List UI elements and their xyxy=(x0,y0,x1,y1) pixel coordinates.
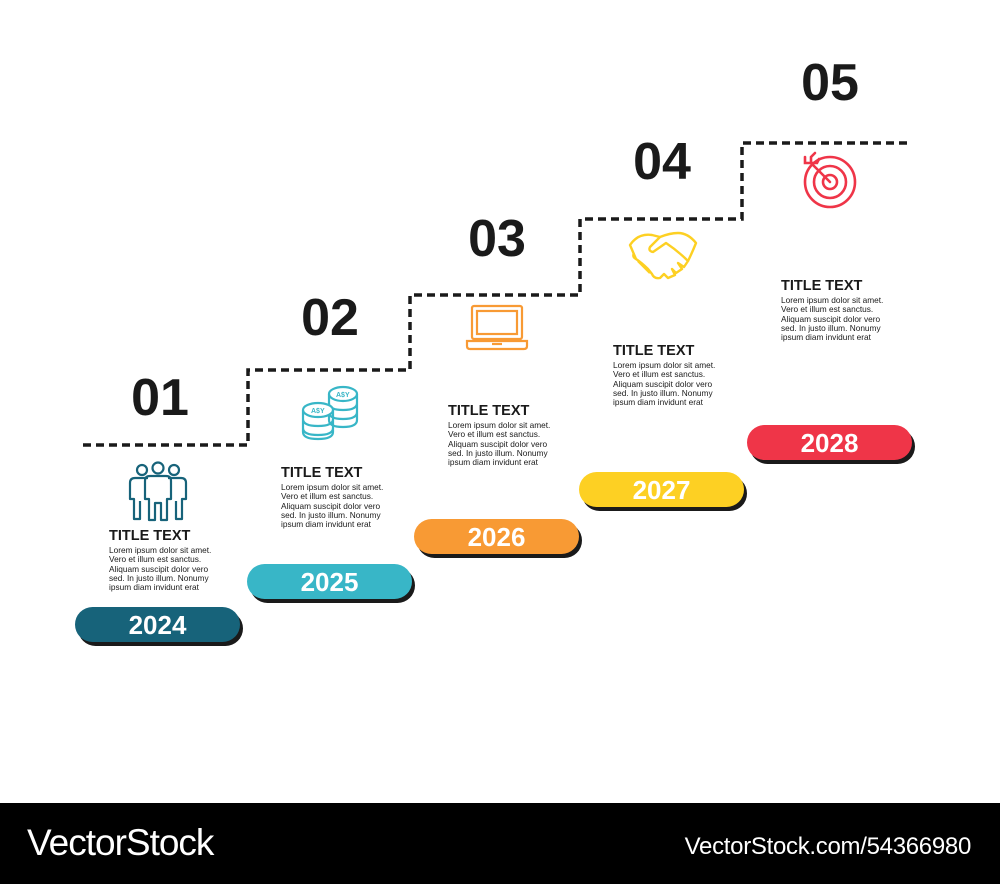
pill 2024: 2024 xyxy=(129,610,186,640)
pill 2026: 2026 xyxy=(468,522,525,552)
text block 5: sed. In justo illum. Nonumy xyxy=(781,323,881,333)
pill 2027: 2027 xyxy=(633,475,690,505)
text block 1: ipsum diam invidunt erat xyxy=(109,582,199,592)
text block 3: Lorem ipsum dolor sit amet. xyxy=(448,420,550,430)
text block 3 xyxy=(448,403,550,467)
number 05: 05 xyxy=(801,54,859,112)
text block 3: sed. In justo illum. Nonumy xyxy=(448,448,548,458)
text block 4: Aliquam suscipit dolor vero xyxy=(613,379,712,389)
number 02: 02 xyxy=(301,289,359,347)
text block 4: Lorem ipsum dolor sit amet. xyxy=(613,360,715,370)
pill 2026 xyxy=(414,519,579,554)
text block 5 xyxy=(781,278,883,342)
icon: people xyxy=(128,461,188,522)
text block 4: sed. In justo illum. Nonumy xyxy=(613,388,713,398)
text block 3: ipsum diam invidunt erat xyxy=(448,457,538,467)
pill 2024 xyxy=(75,607,240,642)
text block 2: Aliquam suscipit dolor vero xyxy=(281,501,380,511)
footer url: VectorStock.com/54366980 xyxy=(685,833,971,860)
icon: handshake xyxy=(628,232,698,280)
pill 2028 xyxy=(747,425,912,460)
icon: laptop xyxy=(466,304,528,350)
pill 2025 xyxy=(247,564,412,599)
text block 2: Lorem ipsum dolor sit amet. xyxy=(281,482,383,492)
number 01: 01 xyxy=(131,369,189,427)
text block 3: TITLE TEXT xyxy=(448,403,529,419)
text block 5: Aliquam suscipit dolor vero xyxy=(781,314,880,324)
text block 1: Vero et illum est sanctus. xyxy=(109,554,201,564)
text block 3: Aliquam suscipit dolor vero xyxy=(448,439,547,449)
text block 1: Lorem ipsum dolor sit amet. xyxy=(109,545,211,555)
text block 5: Lorem ipsum dolor sit amet. xyxy=(781,295,883,305)
text block 2: Vero et illum est sanctus. xyxy=(281,491,373,501)
text block 4: TITLE TEXT xyxy=(613,343,694,359)
pill 2028: 2028 xyxy=(801,428,858,458)
text block 4 xyxy=(613,343,715,407)
text block 2: TITLE TEXT xyxy=(281,465,362,481)
text block 5: Vero et illum est sanctus. xyxy=(781,304,873,314)
text block 1: Aliquam suscipit dolor vero xyxy=(109,564,208,574)
text block 2 xyxy=(281,465,383,529)
icon: coins: A$Y xyxy=(336,392,350,399)
text block 5: TITLE TEXT xyxy=(781,278,862,294)
footer band xyxy=(0,803,1000,884)
text block 1 xyxy=(109,528,211,592)
pill 2025: 2025 xyxy=(301,567,358,597)
pill 2027 xyxy=(579,472,744,507)
icon: coins xyxy=(302,386,358,440)
text block 2: ipsum diam invidunt erat xyxy=(281,519,371,529)
text block 1: sed. In justo illum. Nonumy xyxy=(109,573,209,583)
text block 4: ipsum diam invidunt erat xyxy=(613,397,703,407)
icon: target xyxy=(804,152,856,208)
text block 5: ipsum diam invidunt erat xyxy=(781,332,871,342)
number 03: 03 xyxy=(468,210,526,268)
text block 4: Vero et illum est sanctus. xyxy=(613,369,705,379)
icon: coins: A$Y xyxy=(311,408,325,415)
text block 1: TITLE TEXT xyxy=(109,528,190,544)
footer logo: VectorStock xyxy=(27,822,213,863)
text block 3: Vero et illum est sanctus. xyxy=(448,429,540,439)
number 04: 04 xyxy=(633,133,691,191)
text block 2: sed. In justo illum. Nonumy xyxy=(281,510,381,520)
